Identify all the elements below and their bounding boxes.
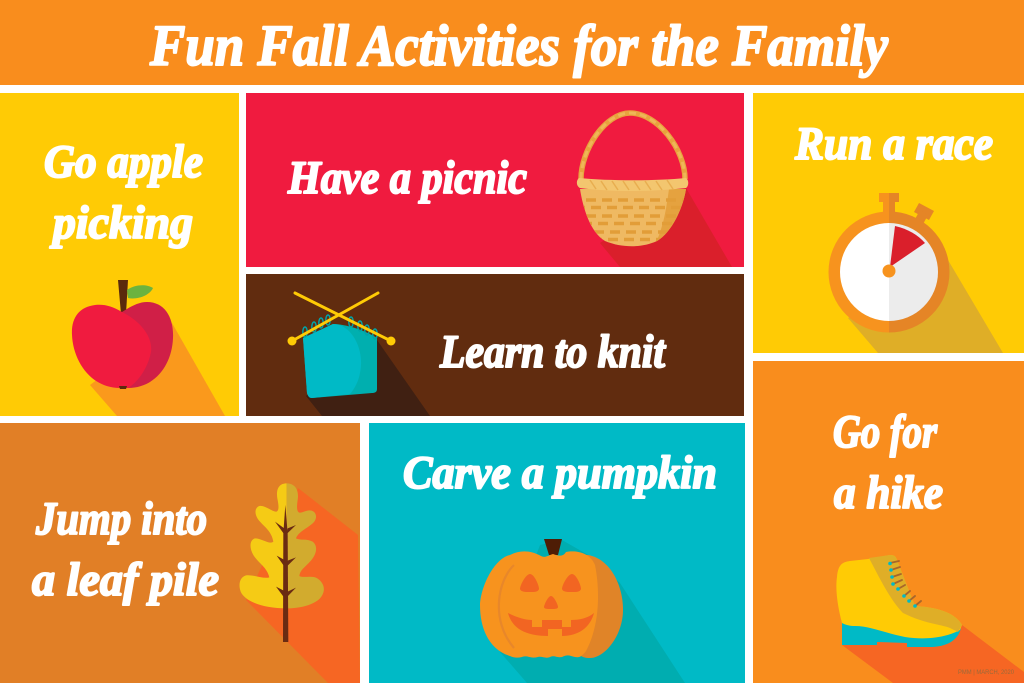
icon: stopwatch <box>828 193 949 332</box>
panel: leaf pile <box>0 423 360 683</box>
leaf shadow <box>246 488 360 683</box>
heading: go apple picking: picking <box>49 197 193 249</box>
panel: pumpkin <box>369 423 745 683</box>
boot shadow <box>842 625 1024 683</box>
heading: have a picnic: Have a picnic <box>287 152 527 204</box>
panel: apple picking <box>0 93 239 416</box>
heading: go for a hike: Go for <box>833 406 938 458</box>
credit line: PMM | MARCH, 2020 <box>958 670 1015 676</box>
pumpkin shadow <box>500 540 685 683</box>
knitting shadow <box>306 340 430 416</box>
panel: race <box>753 93 1024 353</box>
stopwatch shadow <box>848 260 1003 353</box>
panel: picnic <box>246 93 744 267</box>
panel: hike <box>753 361 1024 683</box>
icon: boot <box>836 555 962 647</box>
heading: carve a pumpkin: Carve a pumpkin <box>403 447 717 499</box>
heading: run a race: Run a race <box>794 118 993 170</box>
icon: apple <box>72 280 173 389</box>
header banner <box>0 0 1024 85</box>
title: Fun Fall Activities for the Family <box>149 13 888 78</box>
heading: go for a hike <box>833 406 943 519</box>
icon: knitting <box>288 293 396 398</box>
heading: jump into a leaf pile: Jump into <box>35 493 207 545</box>
heading: go apple picking <box>44 136 203 249</box>
heading: go apple picking: Go apple <box>44 136 203 188</box>
basket shadow <box>600 188 732 267</box>
icon: pumpkin <box>480 539 623 658</box>
icon: oak leaf <box>240 483 324 642</box>
heading: jump into a leaf pile <box>32 493 219 606</box>
icon: basket <box>577 113 690 246</box>
heading: go for a hike: a hike <box>834 467 943 519</box>
apple shadow <box>90 323 225 416</box>
heading: learn to knit: Learn to knit <box>439 326 667 378</box>
heading: jump into a leaf pile: a leaf pile <box>32 554 219 606</box>
panel: knit <box>246 274 744 416</box>
